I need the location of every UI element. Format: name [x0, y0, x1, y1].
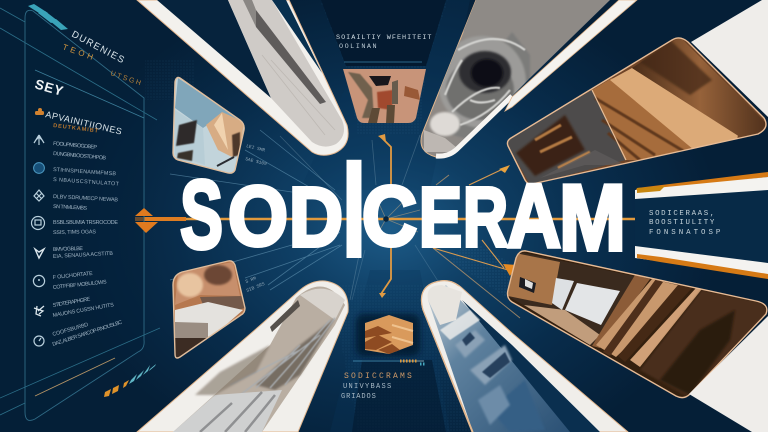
small labels by left photos: S RM	[245, 275, 257, 285]
list item 7: STIDTERAPHGRE	[52, 296, 91, 309]
list item 5	[35, 246, 113, 260]
list item 3: DLBV SDRUMECP NEWAB	[53, 194, 119, 203]
list item 4	[32, 216, 118, 236]
icon: progress hatch	[104, 364, 156, 397]
band: lower white and orange	[635, 246, 768, 279]
list item 2	[34, 163, 120, 188]
pill: top left architecture	[137, 0, 348, 155]
text: right caption: BOOSTIULITY	[649, 219, 716, 227]
title: SODICERAM: M	[559, 165, 626, 270]
small labels by left photos: SAE $109	[245, 156, 268, 167]
list item 4: BSBLSBUMIA TRSROCODE	[53, 220, 118, 226]
photo: top center pill granite	[421, 0, 610, 157]
photo: top right wood interior	[506, 37, 767, 183]
arrow: top connector	[378, 134, 391, 190]
subheading: teoh: TEOH	[61, 42, 97, 63]
pill: bottom left cables	[137, 281, 348, 432]
list item 7	[34, 296, 115, 319]
list item 6	[33, 271, 107, 291]
panel: right text band	[635, 172, 768, 279]
subheading: utsgh: UTSGH	[109, 70, 143, 88]
pill: bottom right blue architecture	[421, 281, 628, 432]
icon: wooden cube	[356, 314, 420, 356]
text: right caption: SODICERAAS,	[649, 210, 716, 218]
arrow: lower right	[433, 240, 517, 276]
heading: bottom center caption: SODICCRAMS	[344, 372, 414, 381]
title: SODICERAM: R	[463, 170, 508, 264]
icon: teal chevrons	[28, 4, 68, 30]
photo: left upper interior	[172, 76, 245, 174]
small labels by left photos	[245, 143, 268, 294]
center node	[383, 216, 389, 222]
arrow: bottom connector	[379, 246, 391, 298]
list item 4: SSIS, TIMS OGAS	[53, 229, 96, 236]
heading: advantages: APVAINITIIONES	[45, 109, 123, 137]
strip: top right white band	[505, 0, 637, 111]
arrow: left diamond marker	[135, 208, 158, 233]
list item 6: COTFFIBF MOBULOWS	[53, 279, 107, 291]
title: SODICERAM: E	[419, 170, 462, 264]
heading: durenies: DURENIES	[70, 29, 127, 66]
heading: bottom center caption: GRIADOS	[341, 393, 377, 401]
title: SODICERAM: D	[289, 170, 343, 264]
list item 2: S NBAUSCSTNULATOT	[53, 177, 120, 188]
heading: top center caption: OOLINAN	[339, 43, 378, 51]
title: SODICERAM: S	[180, 160, 223, 269]
list item 8: DAZ, ALBER SARCOP-RNOUSLBC	[52, 320, 123, 348]
arrow: upper right	[469, 165, 510, 185]
photo: top center figure	[343, 69, 426, 123]
heading: bottom center caption: UNIVYBASS	[343, 383, 393, 391]
photo: bottom right wood room	[500, 250, 768, 400]
list item 3: SN TNMLEMBS	[53, 204, 88, 212]
title: SODICERAM	[180, 133, 626, 286]
list item 1: FOOUPMISOGDBEP	[53, 141, 98, 151]
orange axis line	[135, 218, 640, 220]
list item 7: MAUONS CUSSN HUTITS	[52, 302, 115, 319]
radial lines	[170, 130, 520, 318]
list item 6: F OLICHORTATE	[53, 271, 93, 281]
band: upper white and orange	[635, 172, 768, 199]
title: SODICERAM: C	[362, 169, 417, 263]
heading: bottom center caption	[341, 361, 426, 401]
list item 1: DUNGBNBOOSTDHPOB	[53, 151, 107, 162]
text: right caption: FONSNATOSP	[649, 229, 723, 237]
panel: bottom right white block	[689, 316, 768, 432]
title: SODICERAM: O	[228, 169, 288, 263]
panel: left key list	[0, 4, 160, 420]
list item 8: COOFSBURBD	[52, 322, 89, 338]
heading: sey: SEY	[33, 76, 66, 99]
heading: top center caption	[336, 34, 432, 62]
list item 5: BMVOGBLBE	[53, 246, 83, 253]
panel: top right white block	[691, 0, 768, 117]
photo: left lower sofa	[170, 258, 248, 362]
subheading: deutkamibt: DEUTKAMIBT	[53, 123, 99, 135]
list item 1	[34, 135, 107, 162]
small labels by left photos: SIB SRS	[246, 281, 266, 294]
list item 5: EIA, SENAUSA ACSTITB	[53, 251, 113, 260]
small labels by left photos: LEI SMR	[246, 143, 266, 154]
list item 2: STIHNSPIENAMMFMSB	[53, 167, 117, 177]
icon: people	[35, 108, 44, 115]
title: SODICERAM: A	[507, 167, 561, 267]
text: right caption	[649, 210, 723, 237]
heading: top center caption: SOIAILTIY WFEHITEIT	[336, 34, 432, 42]
list item 3	[34, 190, 119, 212]
title: SODICERAM: I	[342, 133, 366, 286]
